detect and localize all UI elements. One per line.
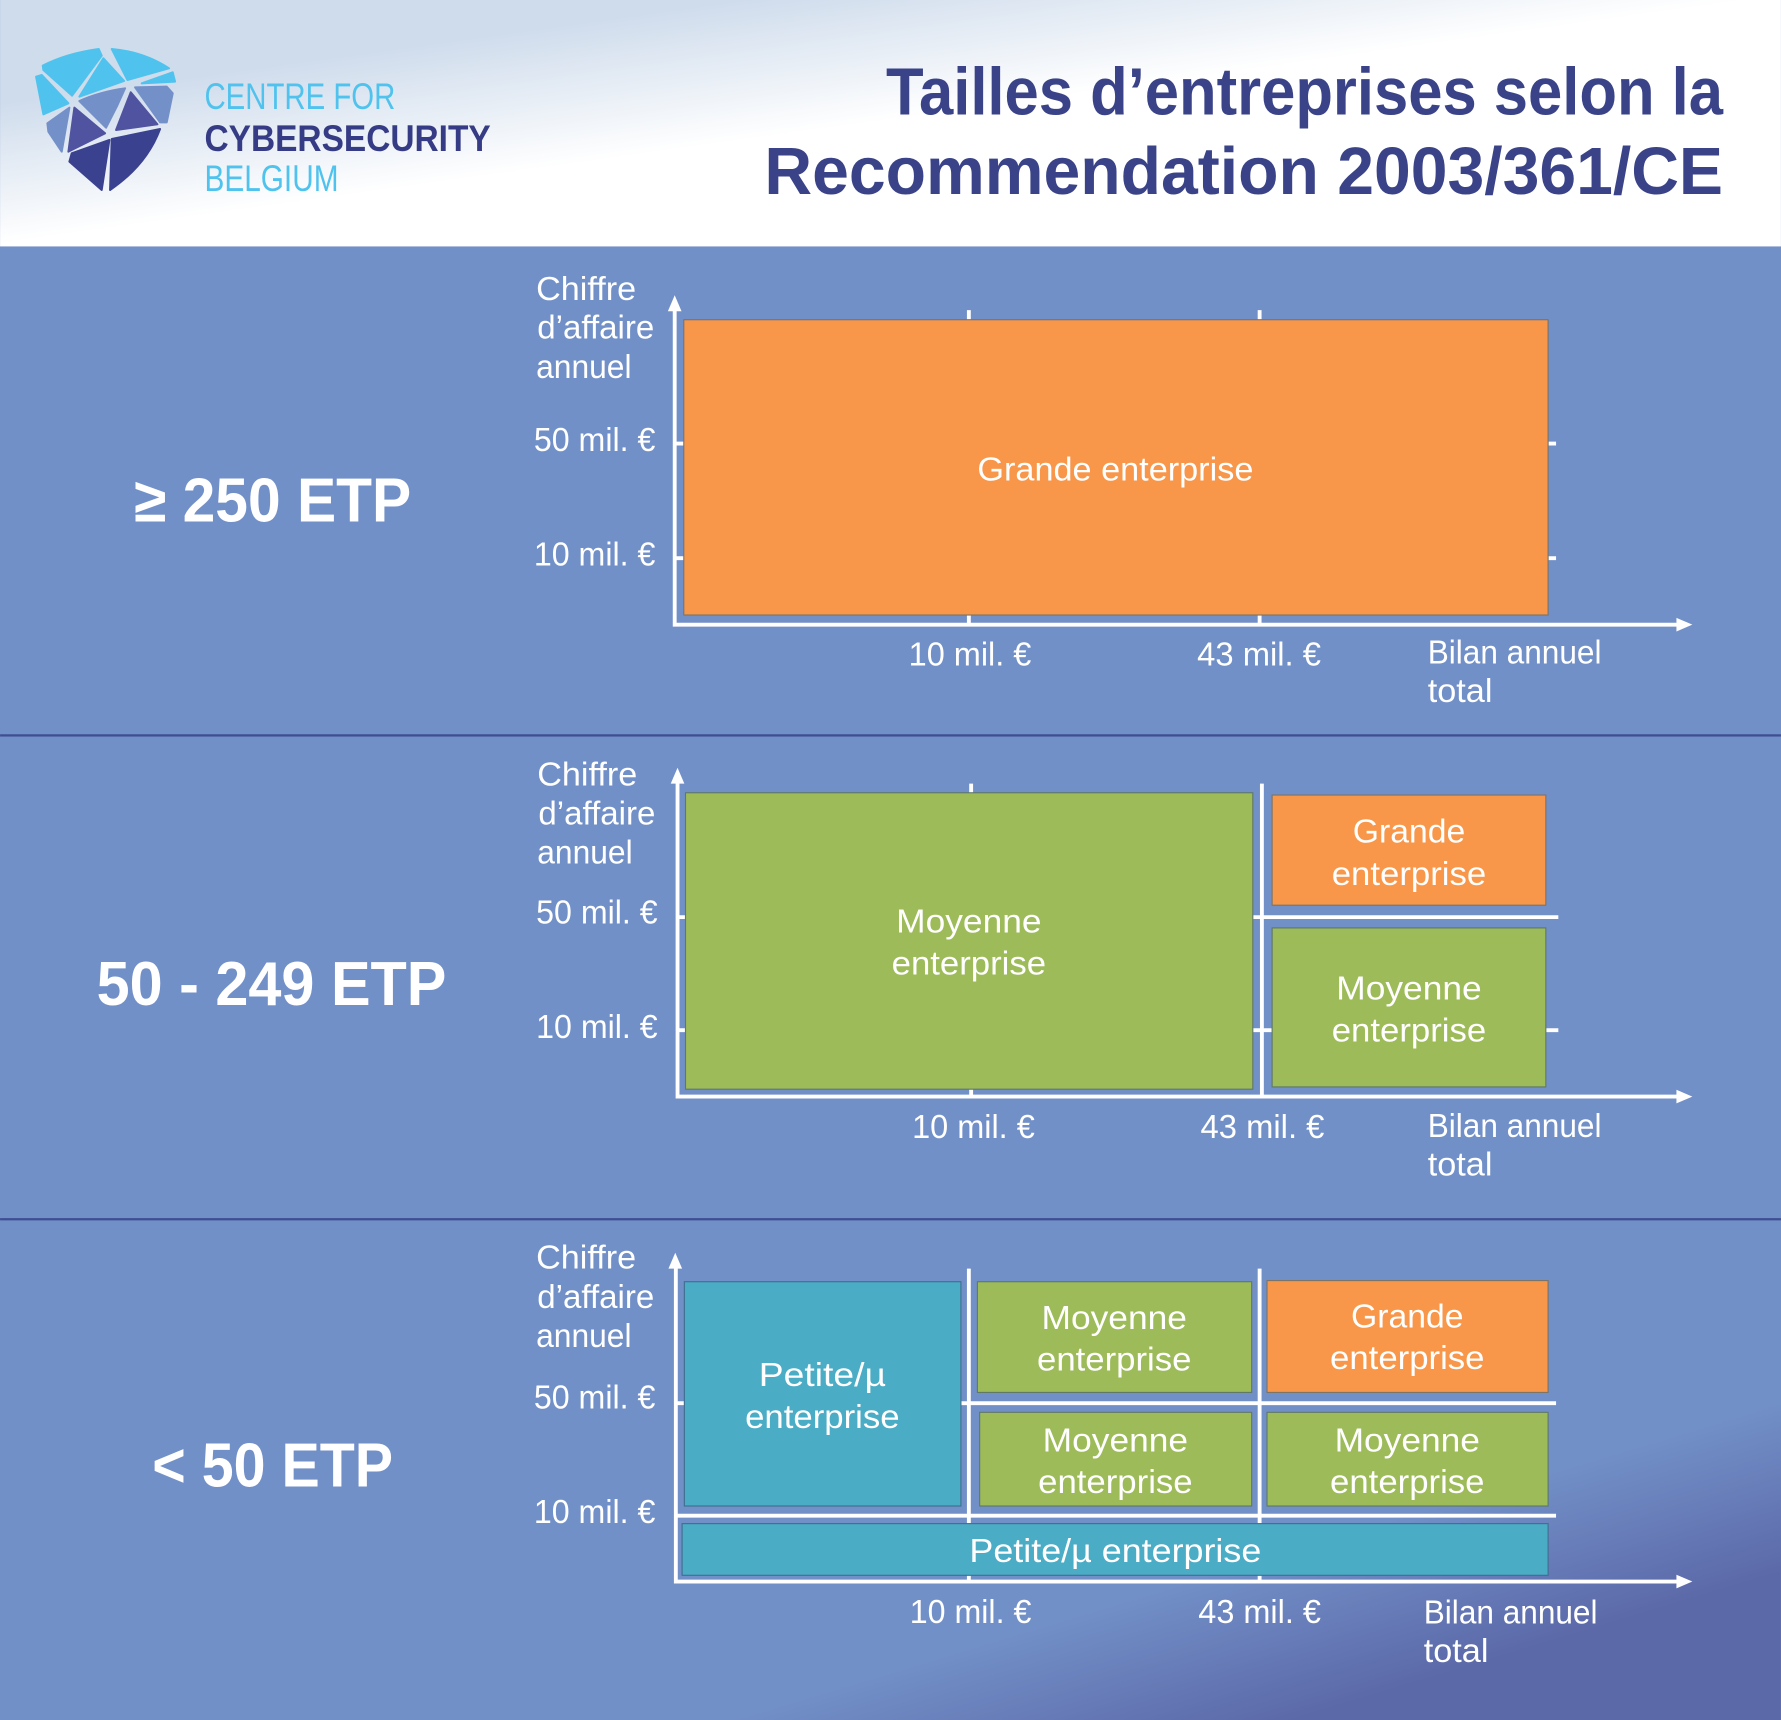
heading: 250 ETP: ≥ 250 ETP bbox=[134, 465, 411, 535]
y axis labels: Chiffre bbox=[536, 1239, 636, 1276]
panel: 50 to 249 ETP bbox=[97, 755, 1692, 1183]
x axis labels: 10 mil. € bbox=[912, 1108, 1035, 1145]
box: moyenne entreprise: Moyenne bbox=[1336, 969, 1482, 1006]
box: grande entreprise: Grande bbox=[1351, 1298, 1463, 1335]
box: moyenne entreprise top: Moyenne bbox=[1042, 1299, 1187, 1336]
y axis labels: 50 mil. € bbox=[534, 1378, 655, 1415]
box: moyenne entreprise: enterprise bbox=[1332, 1011, 1486, 1048]
chart axes and grid bbox=[671, 768, 1692, 1103]
x axis labels: Bilan annuel bbox=[1424, 1594, 1598, 1631]
y axis labels: 50 mil. € bbox=[534, 421, 655, 458]
box: moyenne entreprise top bbox=[977, 1282, 1252, 1392]
box: moyenne entreprise middle: enterprise bbox=[1038, 1463, 1193, 1500]
y axis labels: 10 mil. € bbox=[534, 1493, 655, 1530]
x axis labels: 43 mil. € bbox=[1197, 636, 1321, 673]
x axis labels bbox=[912, 1107, 1601, 1183]
x axis labels: 10 mil. € bbox=[909, 636, 1031, 673]
x axis labels bbox=[909, 633, 1601, 709]
box: petite entreprise wide bbox=[682, 1524, 1548, 1575]
y axis labels: annuel bbox=[537, 834, 633, 871]
panel: 250 ETP and more bbox=[134, 270, 1692, 709]
y axis labels bbox=[534, 1239, 655, 1530]
x axis labels: total bbox=[1428, 1146, 1492, 1183]
box: petite entreprise large: Petite/µ bbox=[759, 1356, 886, 1393]
y axis labels bbox=[536, 755, 658, 1045]
title bbox=[764, 55, 1724, 209]
box: grande entreprise bbox=[684, 320, 1548, 615]
y axis labels: 50 mil. € bbox=[536, 893, 658, 930]
chart axes and grid bbox=[668, 295, 1692, 631]
box: petite entreprise large: enterprise bbox=[745, 1398, 900, 1435]
box: grande entreprise bbox=[1272, 795, 1546, 905]
box: petite entreprise large bbox=[684, 1282, 961, 1506]
logo text: CENTRE FOR bbox=[204, 75, 395, 117]
logo text: BELGIUM bbox=[204, 157, 339, 199]
box: moyenne entreprise right: Moyenne bbox=[1335, 1422, 1480, 1459]
y axis labels: Chiffre bbox=[537, 755, 637, 792]
chart axes and grid bbox=[668, 1253, 1692, 1588]
box: grande entreprise: enterprise bbox=[1330, 1339, 1485, 1376]
x axis labels: 10 mil. € bbox=[910, 1593, 1031, 1630]
x axis labels: total bbox=[1428, 672, 1492, 709]
logo: Centre for Cybersecurity Belgium bbox=[36, 49, 491, 199]
box: grande entreprise: Grande enterprise bbox=[977, 450, 1253, 487]
box: grande entreprise: Grande bbox=[1353, 813, 1465, 850]
x axis labels: 43 mil. € bbox=[1201, 1108, 1324, 1145]
x axis labels: total bbox=[1424, 1632, 1488, 1669]
y axis labels bbox=[534, 270, 655, 573]
y axis labels: 10 mil. € bbox=[536, 1008, 658, 1045]
box: moyenne entreprise bbox=[1272, 928, 1546, 1087]
box: moyenne entreprise large: enterprise bbox=[892, 944, 1046, 981]
box: moyenne entreprise large: Moyenne bbox=[896, 902, 1042, 939]
x axis labels: 43 mil. € bbox=[1198, 1593, 1321, 1630]
title: Recommendation 2003/361/CE bbox=[764, 134, 1723, 209]
box: moyenne entreprise top: enterprise bbox=[1037, 1340, 1191, 1377]
panel: under 50 ETP bbox=[152, 1239, 1692, 1669]
box: grande entreprise bbox=[1267, 1281, 1548, 1392]
box: moyenne entreprise large bbox=[685, 793, 1253, 1089]
box: grande entreprise: enterprise bbox=[1332, 855, 1486, 892]
icon: shield bbox=[36, 49, 175, 190]
x axis labels: Bilan annuel bbox=[1428, 1107, 1601, 1144]
y axis labels: annuel bbox=[536, 348, 632, 385]
x axis labels: Bilan annuel bbox=[1428, 633, 1601, 670]
heading: 50-249 ETP: 50 - 249 ETP bbox=[97, 949, 446, 1019]
y axis labels: Chiffre bbox=[536, 270, 636, 307]
header band bbox=[0, 0, 1781, 246]
box: moyenne entreprise middle bbox=[980, 1412, 1252, 1506]
logo text: CYBERSECURITY bbox=[204, 117, 491, 159]
y axis labels: d’affaire bbox=[537, 1278, 654, 1315]
logo text bbox=[204, 75, 491, 199]
y axis labels: 10 mil. € bbox=[534, 536, 655, 573]
y axis labels: d’affaire bbox=[537, 308, 654, 345]
y axis labels: annuel bbox=[536, 1317, 632, 1354]
box: moyenne entreprise middle: Moyenne bbox=[1043, 1422, 1188, 1459]
heading: under 50 ETP: < 50 ETP bbox=[152, 1431, 393, 1501]
box: moyenne entreprise right: enterprise bbox=[1330, 1463, 1485, 1500]
y axis labels: d’affaire bbox=[538, 795, 655, 832]
box: petite entreprise wide: Petite/µ enterprise bbox=[969, 1532, 1261, 1569]
title: Tailles d’entreprises selon la bbox=[886, 55, 1724, 130]
box: moyenne entreprise right bbox=[1267, 1412, 1548, 1506]
x axis labels bbox=[910, 1593, 1598, 1669]
